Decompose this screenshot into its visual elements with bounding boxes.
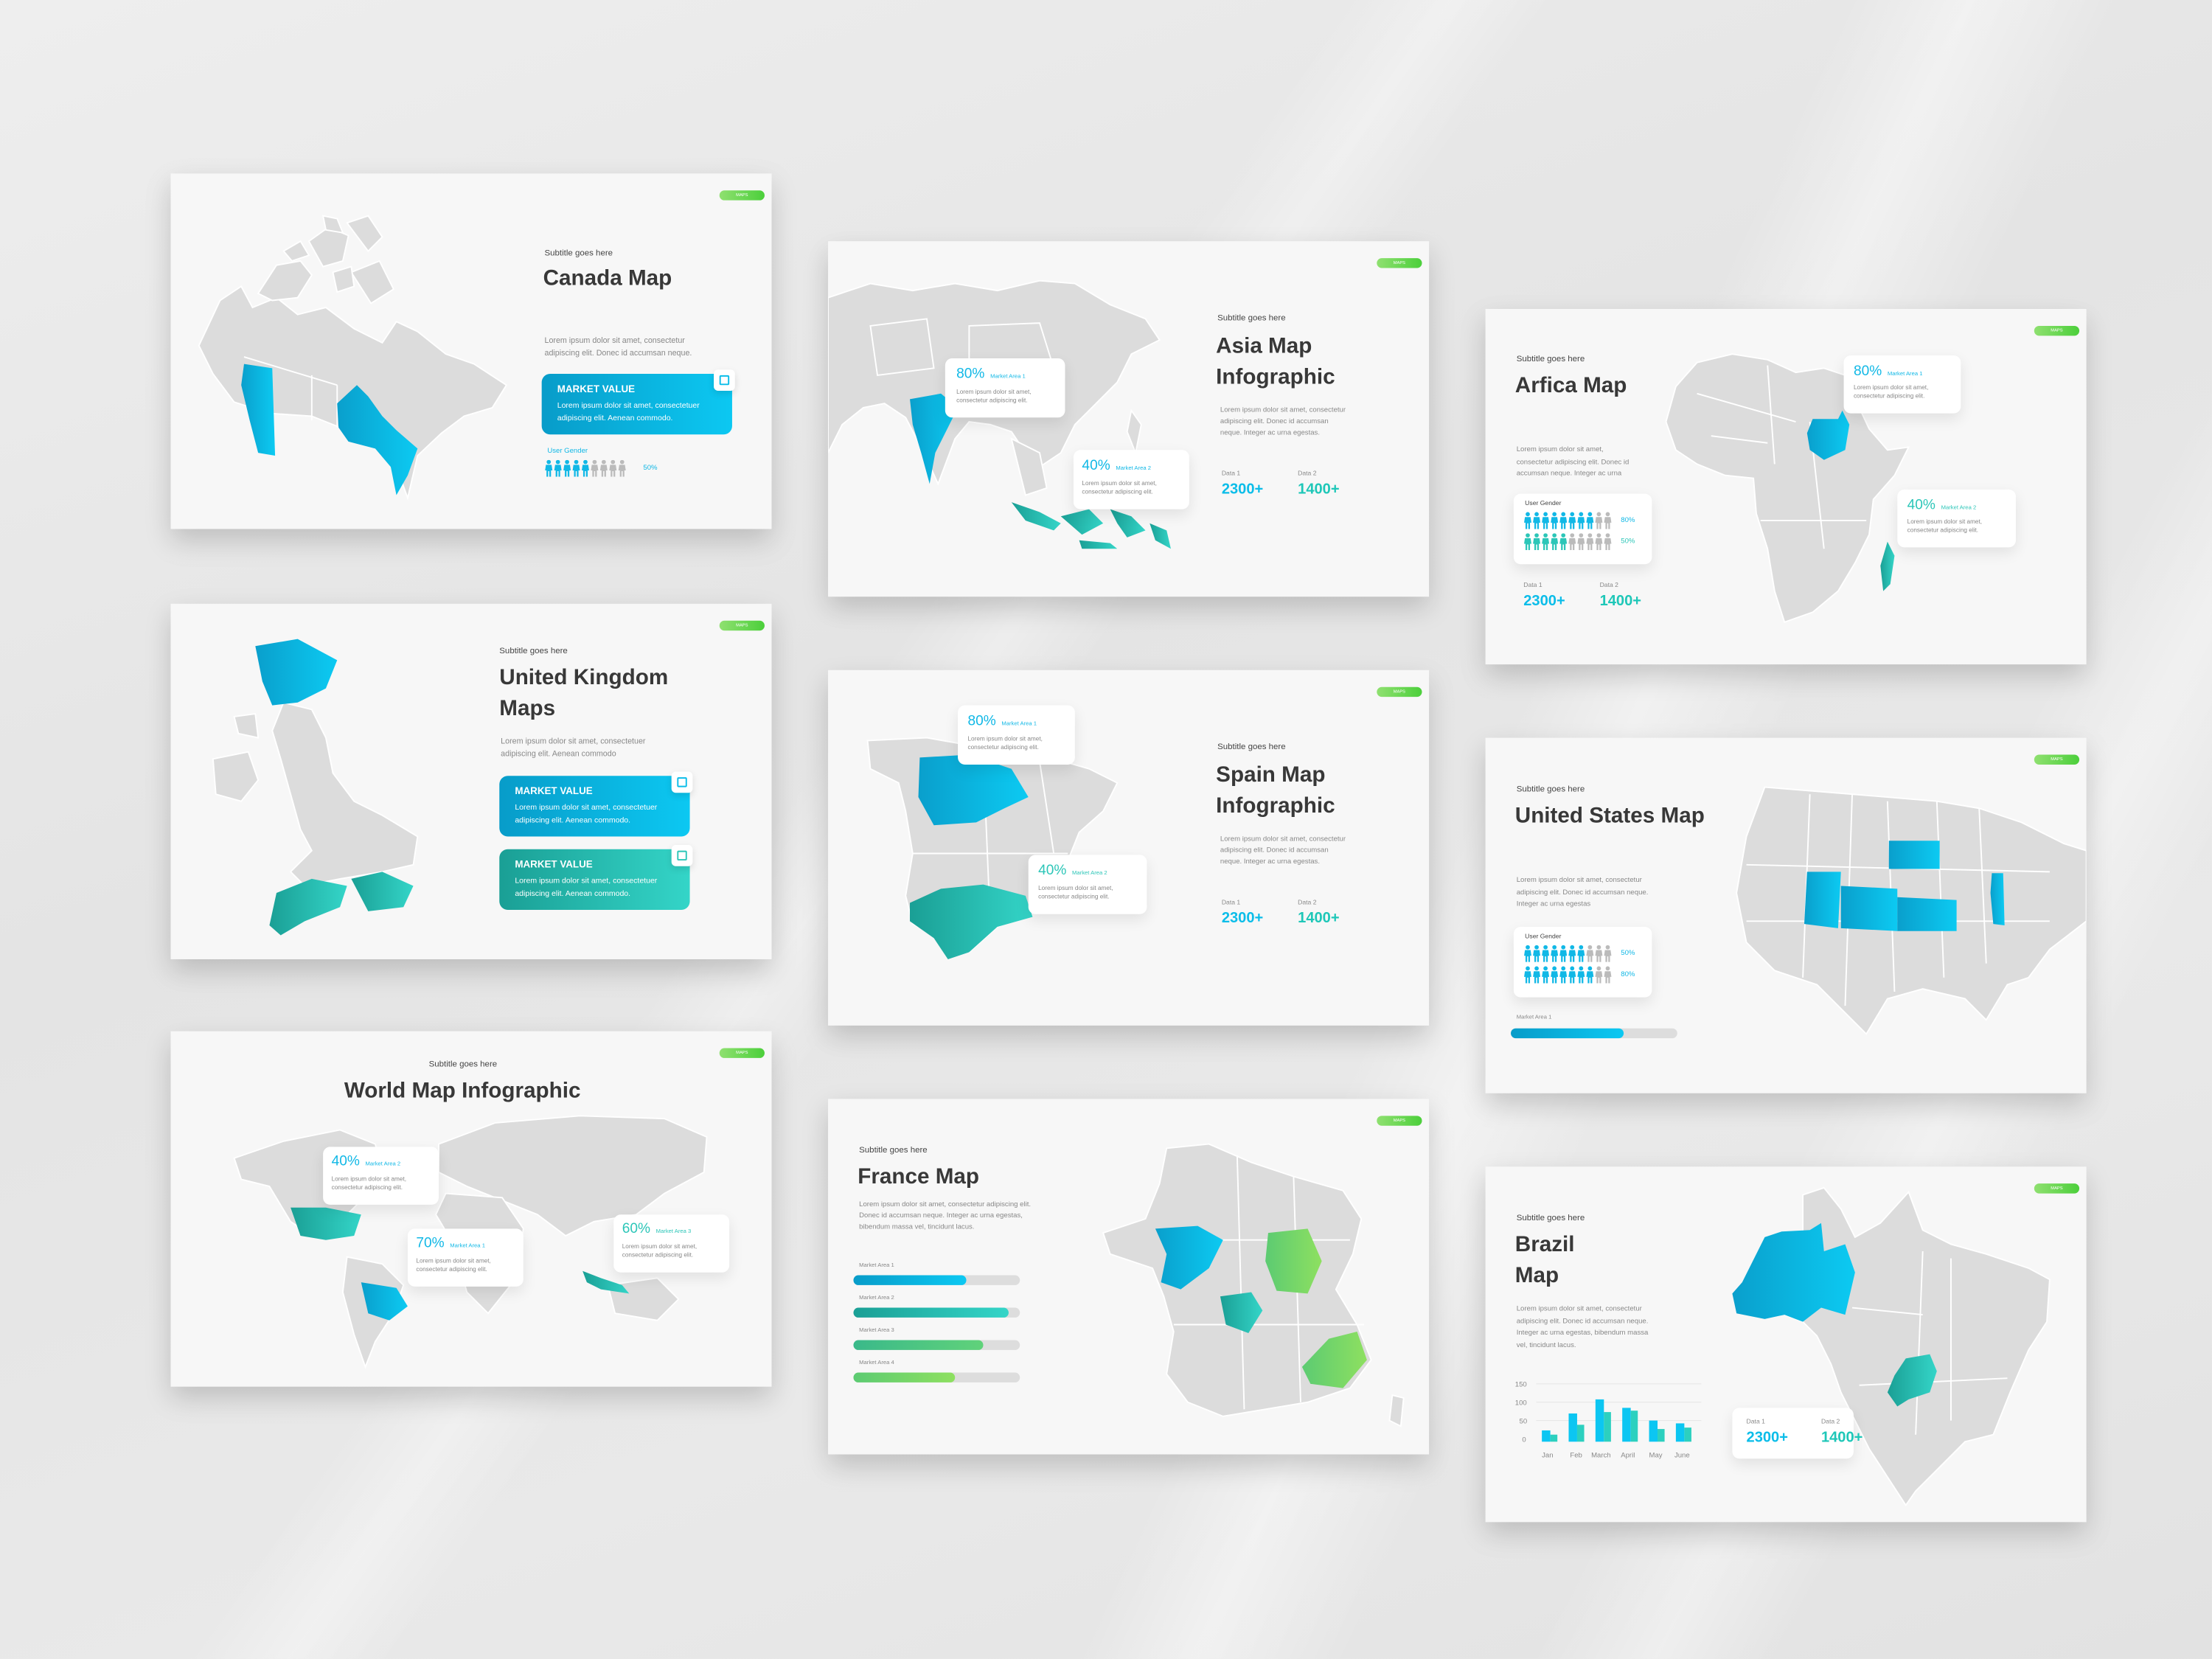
- title: [1216, 334, 1335, 389]
- callout: 40%: [1897, 490, 2016, 547]
- user gender: User Gender: [547, 447, 588, 456]
- map: france: [1105, 1144, 1402, 1425]
- callout: 80%: Market Area 1: [1888, 369, 1923, 377]
- callout: 80% market area 1: Lorem ipsum dolor sit amet,: [956, 388, 1032, 395]
- bar chart: 100: [1515, 1399, 1527, 1408]
- label: maps pill: MAPS: [736, 192, 748, 198]
- callout: 60%: 60%: [622, 1222, 650, 1237]
- title: [499, 666, 668, 721]
- title: Map: [1515, 1264, 1559, 1288]
- body text: neque. Integer ac urna egestas.: [1220, 429, 1320, 437]
- data stats: 1400+: [1298, 910, 1340, 927]
- body text: [1517, 446, 1629, 479]
- data card: 2300+: [1747, 1429, 1788, 1446]
- callout: 80%: Market Area 1: [1001, 720, 1037, 726]
- market value box 1: [499, 776, 690, 837]
- callout: 70%: Market Area 1: [450, 1242, 485, 1248]
- data stats: Data 1: [1222, 899, 1240, 905]
- callout: 60%: [613, 1214, 729, 1273]
- bar chart: Jan: [1542, 1451, 1554, 1459]
- data card: Data 1: [1747, 1418, 1765, 1425]
- title: Brazil: [1515, 1233, 1575, 1257]
- callout: 40%: [323, 1147, 439, 1205]
- data stats: Data 2: [1298, 470, 1317, 477]
- user gender card: User Gender: [1525, 499, 1561, 507]
- bar chart: June: [1674, 1451, 1690, 1459]
- user gender card: 80%: [1621, 516, 1635, 525]
- progress bars: Market Area 4: [859, 1358, 894, 1366]
- subtitle: Subtitle goes here: [499, 647, 568, 656]
- title: Arfica Map: [1515, 374, 1627, 398]
- body text: Lorem ipsum dolor sit amet,: [1517, 446, 1604, 454]
- data stats: 2300+: [1222, 481, 1263, 498]
- progress bars: Market Area 2: [859, 1293, 894, 1301]
- body text: Donec id accumsan neque. Integer ac urna egestas,: [859, 1211, 1023, 1220]
- callout: 80%: Lorem ipsum dolor sit amet,: [1854, 383, 1928, 391]
- data stats: [1222, 899, 1340, 927]
- callout: 80%: consectetur adipiscing elit.: [1854, 392, 1924, 399]
- body text: Integer ac urna egestas, bibendum massa: [1517, 1329, 1648, 1338]
- market value box 1: adipiscing elit. Aenean commodo.: [515, 817, 630, 825]
- panel: spain map slide: [828, 670, 1429, 1026]
- user gender card: 50%: [1621, 950, 1635, 958]
- body text: adipiscing elit. Donec id accumsan: [1220, 417, 1329, 426]
- bar chart: March: [1591, 1451, 1611, 1459]
- body text: Integer ac urna egestas: [1517, 900, 1590, 908]
- bar chart: [1515, 1381, 1702, 1459]
- callout: 80%: consectetur adipiscing elit.: [967, 743, 1039, 751]
- panel: united states map slide: [1486, 738, 2087, 1093]
- body text: [501, 737, 646, 758]
- bar chart: April: [1621, 1451, 1635, 1459]
- panel: spain map slide: MAPS: [1394, 689, 1405, 694]
- body text: Lorem ipsum dolor sit amet, consectetur adipiscing elit.: [859, 1200, 1031, 1209]
- map: asia: [828, 282, 1171, 549]
- map: canada: [200, 217, 506, 495]
- user gender: [545, 447, 658, 477]
- body text: Lorem ipsum dolor sit amet, consectetur: [1220, 406, 1346, 414]
- market value box 1: Lorem ipsum dolor sit amet, consectetuer: [515, 804, 657, 813]
- callout: 40%: Market Area 2: [1072, 869, 1107, 876]
- market value box: [542, 374, 732, 434]
- panel: united states map slide: MAPS: [2051, 756, 2063, 762]
- callout: 40%: Market Area 2: [1941, 504, 1976, 511]
- panel: uk map slide: [170, 604, 772, 959]
- data stats: Data 2: [1600, 581, 1618, 588]
- user gender card: 80%: [1621, 970, 1635, 979]
- title: Asia Map: [1216, 334, 1312, 358]
- title: World Map Infographic: [344, 1079, 581, 1103]
- body text: vel, tincidunt lacus.: [1517, 1340, 1576, 1349]
- panel: brazil map slide: MAPS: [2051, 1185, 2063, 1191]
- callout: 40%: consectetur adipiscing elit.: [332, 1183, 403, 1191]
- callout: 80%: [958, 706, 1075, 765]
- title: Maps: [499, 697, 555, 721]
- data card: 1400+: [1821, 1429, 1863, 1446]
- map: world: [235, 1116, 706, 1364]
- panel: asia map slide: MAPS: [1394, 260, 1405, 265]
- bar chart: May: [1649, 1451, 1663, 1459]
- callout: 70%: [408, 1228, 524, 1287]
- body text: [1516, 1305, 1649, 1349]
- label: maps pill: [720, 190, 765, 201]
- subtitle: Subtitle goes here: [1517, 1214, 1585, 1223]
- title: [1515, 1233, 1575, 1288]
- callout: 40% market area 2: 40%: [1082, 459, 1110, 474]
- data stats: [1222, 470, 1340, 498]
- callout: 40% market area 2: Lorem ipsum dolor sit amet,: [1082, 479, 1157, 487]
- data stats: 2300+: [1222, 910, 1263, 927]
- market value box 1: MARKET VALUE: [515, 787, 593, 797]
- body text: Lorem ipsum dolor sit amet, consectetur: [1517, 876, 1642, 885]
- map: spain: [869, 739, 1116, 959]
- panel: france map slide: [828, 1099, 1429, 1455]
- user gender card: [1514, 494, 1652, 564]
- body text: [1220, 406, 1346, 437]
- subtitle: Subtitle goes here: [1217, 315, 1286, 323]
- body text: bibendum massa vel, tincidunt lacus.: [859, 1223, 974, 1231]
- callout: 80% market area 1: Market Area 1: [990, 372, 1026, 380]
- callout: 40%: consectetur adipiscing elit.: [1038, 893, 1110, 900]
- progress bars: Market Area 3: [859, 1326, 894, 1333]
- market value box 2: MARKET VALUE: [515, 860, 593, 870]
- bar chart: Feb: [1570, 1451, 1582, 1459]
- data card: Data 2: [1821, 1418, 1840, 1425]
- panel: asia map slide: [828, 241, 1429, 597]
- panel: uk map slide: MAPS: [736, 622, 748, 627]
- callout: 80%: 80%: [967, 714, 996, 729]
- market value box: MARKET VALUE: [557, 385, 635, 395]
- title: Canada Map: [543, 267, 672, 291]
- data stats: Data 1: [1523, 581, 1543, 588]
- callout: 40% market area 2: consectetur adipiscing elit.: [1082, 488, 1153, 495]
- progress bars: [854, 1261, 1020, 1382]
- market value box 2: [499, 849, 690, 910]
- panel: france map slide: MAPS: [1394, 1117, 1405, 1123]
- callout: 40%: 40%: [1038, 863, 1066, 879]
- body text: [859, 1200, 1031, 1231]
- market value box 2: adipiscing elit. Aenean commodo.: [515, 890, 630, 899]
- map: uk: [214, 639, 417, 935]
- market value box: adipiscing elit. Aenean commodo.: [557, 414, 673, 423]
- callout: 40%: Lorem ipsum dolor sit amet,: [1907, 518, 1982, 525]
- data stats: Data 1: [1222, 470, 1240, 477]
- callout: 80% market area 1: [945, 358, 1065, 417]
- title: [1216, 763, 1335, 818]
- bar chart: 50: [1520, 1417, 1527, 1425]
- title: United States Map: [1515, 804, 1705, 828]
- body text: Lorem ipsum dolor sit amet, consectetur: [1517, 1305, 1642, 1313]
- bar chart: 150: [1515, 1381, 1527, 1389]
- data stats: Data 2: [1298, 899, 1317, 905]
- body text: [1220, 835, 1346, 866]
- data stats: 1400+: [1298, 481, 1340, 498]
- panel: world map slide: MAPS: [736, 1049, 748, 1055]
- callout: 40% market area 2: Market Area 2: [1116, 464, 1151, 471]
- user gender card: 50%: [1621, 538, 1635, 546]
- callout: 70%: consectetur adipiscing elit.: [416, 1265, 487, 1273]
- callout: 70%: 70%: [416, 1236, 445, 1251]
- body text: neque. Integer ac urna egestas.: [1220, 858, 1320, 866]
- panel: africa map slide: [1486, 309, 2087, 664]
- panel: africa map slide: MAPS: [2051, 327, 2063, 333]
- body text: [1517, 876, 1648, 908]
- callout: 80%: [1844, 355, 1961, 414]
- body text: [544, 337, 692, 358]
- callout: 60%: consectetur adipiscing elit.: [622, 1251, 693, 1259]
- progress bars: Market Area 1: [859, 1261, 894, 1268]
- progress bar: market area 1: [1511, 1013, 1677, 1038]
- callout: 40%: Lorem ipsum dolor sit amet,: [332, 1175, 406, 1182]
- callout: 40% market area 2: [1074, 450, 1189, 509]
- map: brazil: [1732, 1189, 2049, 1504]
- subtitle: Subtitle goes here: [429, 1061, 497, 1069]
- icon: wallet: [714, 369, 735, 391]
- panel: brazil map slide: [1486, 1166, 2087, 1522]
- subtitle: Subtitle goes here: [859, 1147, 928, 1155]
- body text: Lorem ipsum dolor sit amet, consectetur: [544, 337, 685, 346]
- subtitle: Subtitle goes here: [1217, 743, 1286, 752]
- title: France Map: [858, 1165, 979, 1189]
- market value box: Lorem ipsum dolor sit amet, consectetuer: [557, 402, 700, 411]
- bar chart: 0: [1522, 1436, 1526, 1444]
- body text: consectetur adipiscing elit. Donec id: [1517, 458, 1629, 466]
- panel: canada map slide: [170, 173, 772, 529]
- callout: 40%: Market Area 2: [366, 1160, 400, 1166]
- callout: 60%: Lorem ipsum dolor sit amet,: [622, 1243, 697, 1250]
- body text: accumsan neque. Integer ac urna: [1517, 470, 1621, 479]
- callout: 80% market area 1: 80%: [956, 366, 984, 382]
- map: usa: [1737, 787, 2085, 1032]
- callout: 40%: consectetur adipiscing elit.: [1907, 526, 1978, 533]
- subtitle: Subtitle goes here: [1517, 786, 1585, 794]
- body text: adipiscing elit. Donec id accumsan: [1220, 846, 1329, 855]
- map: africa: [1666, 355, 1907, 621]
- body text: adipiscing elit. Donec id accumsan neque.: [544, 349, 692, 358]
- callout: 40%: Lorem ipsum dolor sit amet,: [1038, 885, 1113, 891]
- body text: Lorem ipsum dolor sit amet, consectetuer: [501, 738, 645, 746]
- callout: 40%: 40%: [332, 1154, 360, 1169]
- data stats: 1400+: [1600, 593, 1641, 610]
- progress bar: market area 1: Market Area 1: [1517, 1013, 1551, 1020]
- user gender: 50%: [643, 464, 658, 473]
- panel: world map slide: [170, 1032, 772, 1387]
- title: Infographic: [1216, 366, 1335, 389]
- callout: 40%: 40%: [1907, 498, 1935, 513]
- icon 1: [672, 772, 692, 793]
- callout: 80% market area 1: consectetur adipiscing elit.: [956, 397, 1028, 403]
- body text: adipiscing elit. Aenean commodo: [501, 750, 616, 758]
- market value box 2: Lorem ipsum dolor sit amet, consectetuer: [515, 877, 657, 886]
- callout: 80%: 80%: [1854, 364, 1882, 380]
- icon 2: [672, 845, 692, 866]
- data stats: 2300+: [1523, 593, 1565, 610]
- callout: 60%: Market Area 3: [656, 1227, 691, 1234]
- subtitle: Subtitle goes here: [544, 250, 613, 258]
- data card: [1732, 1408, 1854, 1458]
- data stats: [1523, 581, 1641, 610]
- callout: 70%: Lorem ipsum dolor sit amet,: [416, 1257, 491, 1264]
- body text: adipiscing elit. Donec id accumsan neque.: [1517, 888, 1648, 897]
- title: Spain Map: [1216, 763, 1325, 787]
- title: Infographic: [1216, 794, 1335, 818]
- subtitle: Subtitle goes here: [1517, 355, 1585, 364]
- user gender card: User Gender: [1525, 933, 1561, 939]
- callout: 80%: Lorem ipsum dolor sit amet,: [967, 735, 1043, 742]
- body text: adipiscing elit. Donec id accumsan neque.: [1517, 1317, 1648, 1325]
- title: United Kingdom: [499, 666, 668, 690]
- body text: Lorem ipsum dolor sit amet, consectetur: [1220, 835, 1346, 844]
- callout: 40%: [1029, 855, 1147, 914]
- user gender card: [1514, 927, 1652, 998]
